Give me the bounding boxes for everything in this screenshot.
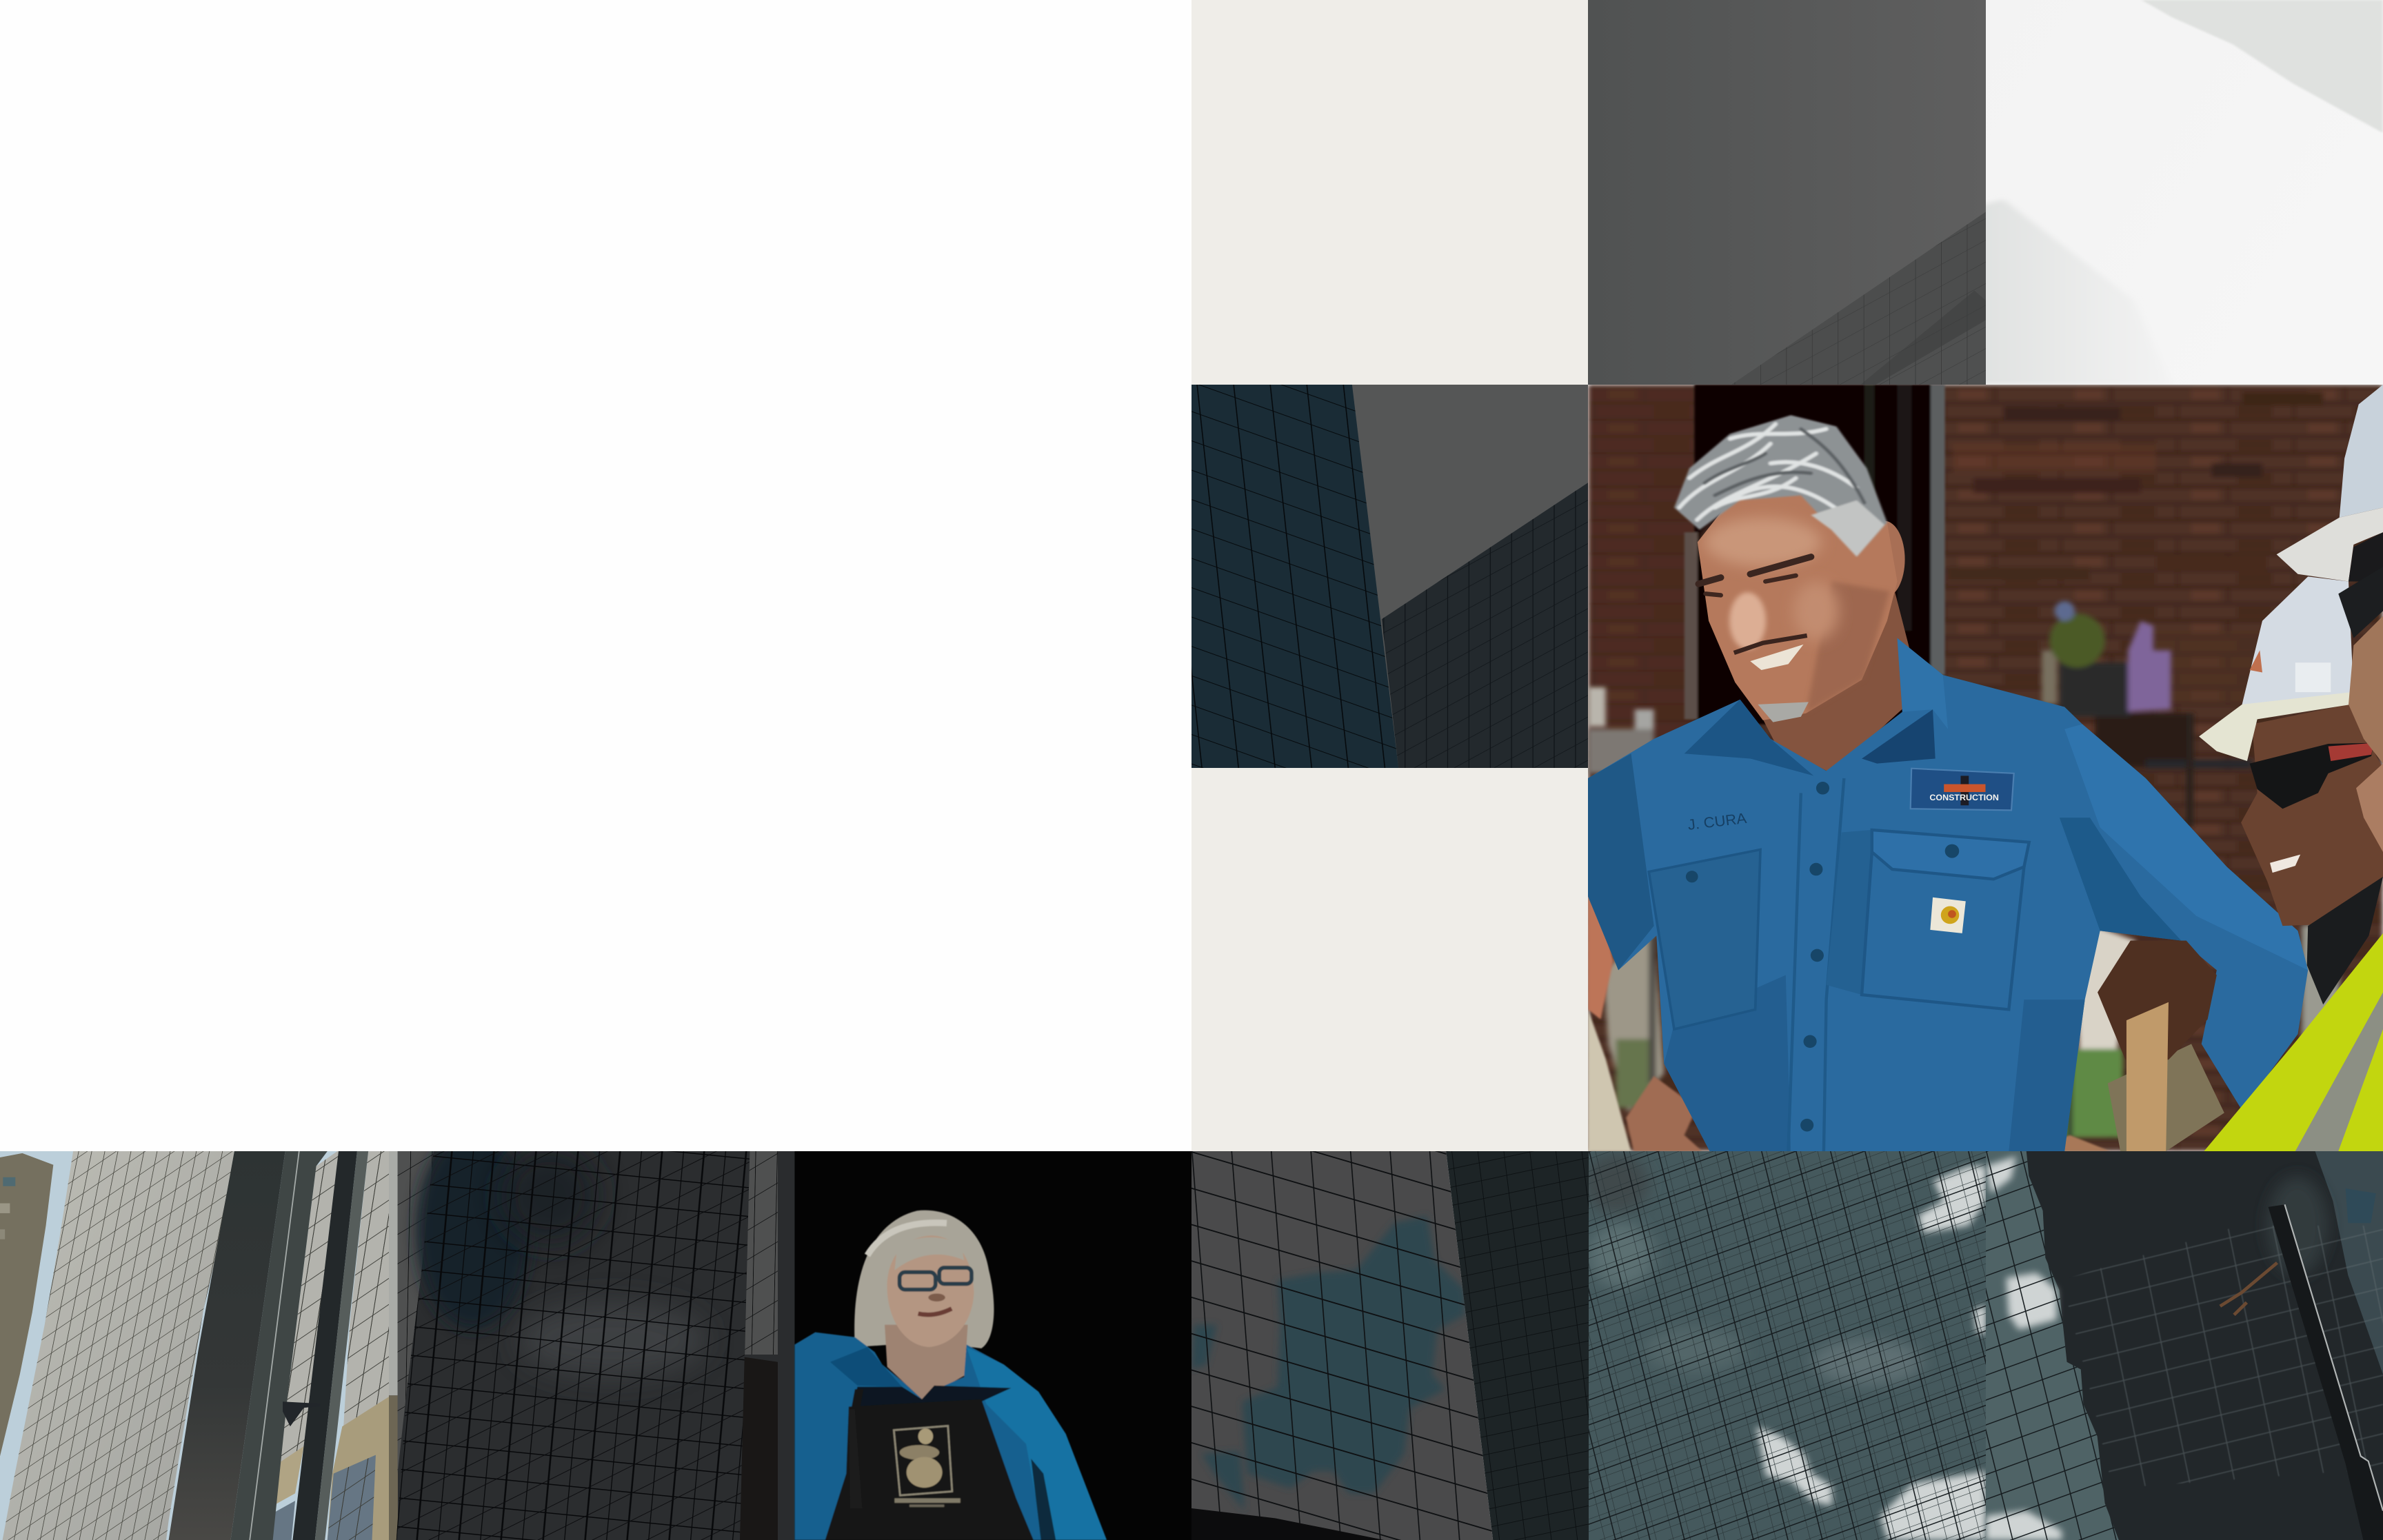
lamp pole: [2269, 1204, 2383, 1540]
grey hair: [1674, 415, 1887, 557]
face: [887, 1235, 974, 1347]
grey corner panes: [398, 1151, 778, 1540]
pale clutter left: [1588, 687, 1664, 1113]
hand gripping shovel handle: [2098, 941, 2217, 1151]
top right teal tower: [2267, 1151, 2383, 1375]
window strips behind pole: [280, 1151, 389, 1463]
sky: [0, 1151, 389, 1540]
hair: [854, 1210, 994, 1348]
left edge coworker arm: [1588, 896, 1631, 1151]
left tower: [1192, 385, 1398, 768]
shaded adjoining tower: [1446, 1151, 1589, 1540]
chest label: [1930, 898, 1966, 933]
neck: [1763, 581, 1913, 773]
left glass area with clouds: [1986, 1151, 2119, 1540]
tower face with sky reflection: [396, 1131, 750, 1540]
panel: pale sky with building corners: [1986, 0, 2383, 385]
front worker hard hat: [2277, 385, 2383, 852]
pale and green background under arm: [2060, 926, 2135, 1142]
left pocket and flap: [1649, 849, 1760, 1029]
dark storefront background: [794, 1151, 1192, 1540]
blue work shirt: [1588, 638, 2308, 1151]
tonal patches: [1584, 1154, 1923, 1384]
panel: dark glass tower: [389, 1151, 778, 1540]
panel: dark tower with reflected grid and lamp pole: [1986, 1151, 2383, 1540]
window grid: [1589, 1151, 1986, 1540]
blue shirt: [794, 1333, 1107, 1540]
panel: photo of smiling construction worker: [1588, 385, 2383, 1151]
shirt placket: [1788, 778, 1844, 1151]
cloud reflections: [1756, 1166, 1986, 1540]
embroidered name: J. CURA: [1687, 809, 1748, 833]
building corner silhouette: [1731, 212, 1986, 385]
potted plant and railing: [2042, 601, 2252, 827]
dark doorway and post: [1685, 385, 1945, 724]
main dark column: [169, 1151, 328, 1540]
pale glass tower: [3, 1151, 234, 1540]
head and face: [1674, 415, 1905, 722]
beige building reflection: [269, 1397, 389, 1540]
panel: dark grey sky with building corner: [1588, 0, 1986, 385]
right pocket and flap: [1827, 830, 2029, 1009]
pale strip at left: [389, 1151, 398, 1540]
panel: beige block lower: [1192, 768, 1588, 1151]
brick wall background: [1588, 385, 2383, 1151]
panel: beige block top: [1192, 0, 1588, 385]
high visibility vest: [2204, 933, 2383, 1151]
hands on hips: [1626, 1076, 2110, 1151]
panel: blank white area: [0, 0, 1192, 1151]
lower building fading into fog: [1974, 199, 2172, 385]
company patch: CONSTRUCTION: [1929, 793, 1999, 802]
panel: dark glass buildings: [1192, 385, 1588, 768]
crane reflection: [2220, 1263, 2277, 1315]
woman figure: [794, 1210, 1107, 1540]
right tower: [1382, 483, 1588, 768]
reflected window grid: [2062, 1226, 2383, 1488]
panel: pale tower, column and reflection: [0, 1151, 389, 1540]
panel: grey glass tower with sky reflections: [1192, 1151, 1589, 1540]
camouflage sleeve: [2108, 1044, 2224, 1151]
glasses: [900, 1268, 972, 1290]
second worker in hard hat and safety glasses: [2199, 576, 2383, 1004]
reflective tower face: [1192, 1151, 1493, 1540]
far tower: [0, 1153, 53, 1456]
lamp pole: [283, 1151, 368, 1540]
panel: woman in apron on black background: [778, 1151, 1192, 1540]
nose and mouth: [928, 1293, 945, 1301]
buttons: [1686, 782, 1959, 1131]
apron: [825, 1399, 1034, 1540]
panel: glass tower with cloud reflections: [1589, 1151, 1986, 1540]
upper right building fading into fog: [2142, 0, 2383, 133]
apron emblem: [894, 1426, 961, 1507]
company patch: [1911, 769, 2014, 810]
neck: [885, 1325, 968, 1399]
